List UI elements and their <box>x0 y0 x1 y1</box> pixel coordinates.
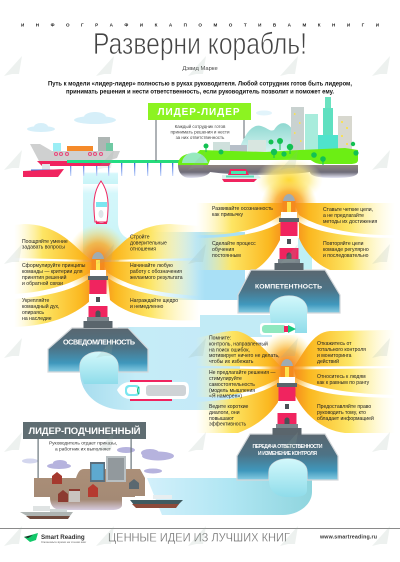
small red ship <box>23 164 64 177</box>
lighthouse 3 rays <box>196 330 395 433</box>
tips: delegation left: стимулируйте <box>209 375 242 382</box>
island 3: delegation and control: И ИЗМЕНЕНИЕ КОНТРОЛЯ <box>258 451 317 457</box>
tips: delegation right: тотального контроля <box>317 347 366 353</box>
tips: competence left <box>212 205 273 259</box>
sign: leader-leader: ЛИДЕР-ЛИДЕР <box>158 107 240 118</box>
skyscrapers <box>291 97 352 154</box>
tips: awareness left: командный дух, <box>22 303 59 310</box>
tips: competence right: Повторяйте цели <box>323 240 364 247</box>
lighthouse 2 <box>274 194 304 270</box>
footer logo: Сэкономьте время на чтении книг <box>41 540 86 544</box>
tips: delegation left <box>209 336 280 428</box>
tips: delegation left: диалоги, они <box>209 410 240 416</box>
purple clouds <box>22 447 174 474</box>
tips: delegation left: чтобы их избежать <box>209 359 254 365</box>
tips: awareness left: команды — критерии для <box>22 269 83 275</box>
low buildings <box>213 140 266 154</box>
bridge pillars <box>70 163 173 176</box>
tips: delegation right: и мониторинга <box>317 353 352 359</box>
tips: delegation right: Относитесь к людям <box>317 374 366 380</box>
tips: delegation left: на поиск ошибок, <box>209 347 250 353</box>
tips: awareness right: доверительные <box>130 240 167 246</box>
tips: delegation left: Ведите короткие <box>209 404 249 410</box>
tips: delegation right: руководить тому, кто <box>317 410 366 416</box>
tips: awareness right <box>130 234 183 310</box>
author: Дэвид Марке <box>182 66 218 72</box>
tips: awareness left: опираясь <box>22 310 44 316</box>
island 2: competence <box>238 270 340 333</box>
tips: delegation left: контроль, направленный <box>209 340 268 348</box>
lighthouse 1 rays <box>14 224 200 327</box>
houses <box>52 472 139 502</box>
subordinate caption: Руководитель отдает приказы, <box>49 440 117 446</box>
island 3: delegation and control <box>237 434 338 497</box>
tips: awareness left: принятия решений <box>22 274 67 281</box>
lighthouse 1 <box>84 252 112 328</box>
bridge <box>67 160 180 163</box>
tips: awareness right: Начинайте любую <box>130 262 173 269</box>
tips: awareness right: работу с обозначения <box>130 269 182 275</box>
tips: awareness right: и немедленно <box>130 304 164 310</box>
tips: delegation left: самостоятельность <box>209 382 255 388</box>
lighthouse 2 rays <box>196 158 395 270</box>
tips: delegation left: эффективность <box>209 422 247 428</box>
tips: delegation right: Предоставляйте право <box>317 403 371 410</box>
cruise liner <box>117 380 189 401</box>
island grass <box>178 148 358 165</box>
horizontal ship near competence <box>260 323 296 335</box>
island <box>34 469 145 510</box>
sign: leader-subordinate: ЛИДЕР-ПОДЧИНЕННЫЙ <box>28 425 141 437</box>
clouds <box>27 110 272 132</box>
scene: leader-leader harbour <box>23 97 359 186</box>
subordinate caption: а работник их выполняет <box>55 446 112 452</box>
island soil <box>178 165 358 178</box>
big ship <box>30 137 120 166</box>
tips: competence right: Ставьте четкие цели, <box>323 207 373 213</box>
sign caption: принимать решения и нести <box>170 129 230 134</box>
title: Разверни корабль! <box>93 26 307 61</box>
intro text: принимать решения и нести ответственность, если руководитель позволит и поможет ему. <box>66 89 334 95</box>
tips: delegation left: повышают <box>209 416 235 422</box>
mountains <box>238 123 300 152</box>
island 1: awareness: ОСВЕДОМЛЕННОСТЬ <box>63 338 135 346</box>
tips: competence right: а не предлагайте <box>323 212 364 219</box>
vertical ship <box>94 181 108 224</box>
tips: delegation right: Откажитесь от <box>317 341 352 347</box>
tips: competence left: постоянным <box>212 253 241 259</box>
sign: leader-subordinate <box>23 422 146 439</box>
intro text <box>48 80 352 95</box>
tips: awareness right: желаемого результата <box>130 275 183 281</box>
tips: delegation left: мотивирует ничего не делать, <box>209 353 280 359</box>
tips: delegation left: (модель мышления <box>209 388 255 394</box>
footer logo: Smart Reading <box>41 534 85 541</box>
tips: awareness left: на наследие <box>22 316 52 322</box>
tips: delegation right: действий <box>317 358 339 365</box>
tips: delegation left: Помните: <box>209 336 231 342</box>
white ship <box>20 506 73 519</box>
dome <box>182 152 208 163</box>
footer logo <box>24 533 86 544</box>
tips: competence right <box>323 207 377 259</box>
tips: competence left: Сделайте процесс <box>212 240 256 247</box>
tips: competence left: как привычку <box>212 212 244 218</box>
island 3: delegation and control: ПЕРЕДАЧА ОТВЕТСТВЕННОСТИ <box>252 444 323 450</box>
lighthouse 3 <box>272 359 302 435</box>
subordinate caption <box>49 440 117 452</box>
tips: delegation left: «Я намерен») <box>209 394 242 400</box>
tips: awareness left: Сформулируйте принципы <box>22 262 86 269</box>
tips: awareness right: Стройте <box>130 234 150 240</box>
water channel under bridge <box>83 172 118 186</box>
footer slogan: ЦЕННЫЕ ИДЕИ ИЗ ЛУЧШИХ КНИГ <box>108 530 290 544</box>
dark ship <box>130 495 183 508</box>
office buildings <box>90 456 126 482</box>
top caption: И Н Ф О Г Р А Ф И К А П О М О Т И В А М К Н И Г И <box>21 22 379 28</box>
tips: awareness right: Награждайте щедро <box>130 297 178 304</box>
sign poles <box>38 439 39 478</box>
tips: awareness left: Поощряйте умение <box>22 238 68 245</box>
tips: delegation left: Не предлагайте решения — <box>209 369 276 376</box>
intro text: Путь к модели «лидер-лидер» полностью в руках руководителя. Любой сотрудник готов быть лидером, <box>48 80 352 88</box>
sign poles <box>156 120 157 161</box>
tips: awareness left: Укрепляйте <box>22 297 50 304</box>
tips: competence left: Развивайте осознанность <box>212 205 273 212</box>
tips: awareness left: и обратной связи <box>22 280 63 287</box>
red cruise ship <box>222 169 261 182</box>
island 2: competence: КОМПЕТЕНТНОСТЬ <box>255 284 322 290</box>
footer line <box>0 528 400 529</box>
sign: leader-leader <box>148 103 251 120</box>
tips: awareness left <box>22 238 86 322</box>
scene: leader-subordinate town <box>20 439 183 519</box>
trees <box>204 138 359 165</box>
sign caption: за них ответственность <box>176 135 225 140</box>
tips: competence right: команде регулярно <box>323 247 369 253</box>
tips: delegation right: как к равным по рангу <box>317 380 370 386</box>
tips: delegation right: обладает информацией <box>317 415 374 422</box>
tips: competence right: методы их достижения <box>323 219 377 225</box>
tips: competence right: и последовательно <box>323 253 369 259</box>
sign caption: Каждый сотрудник готов <box>175 123 226 129</box>
tips: awareness left: задавать вопросы <box>22 245 65 251</box>
water channel and paths <box>80 184 312 515</box>
tips: delegation right <box>317 341 374 422</box>
footer url: www.smartreading.ru <box>319 534 377 540</box>
tips: awareness right: отношения <box>130 246 156 252</box>
tips: competence left: обучения <box>212 247 234 253</box>
sign caption <box>170 123 230 140</box>
island 1: awareness <box>48 328 148 384</box>
